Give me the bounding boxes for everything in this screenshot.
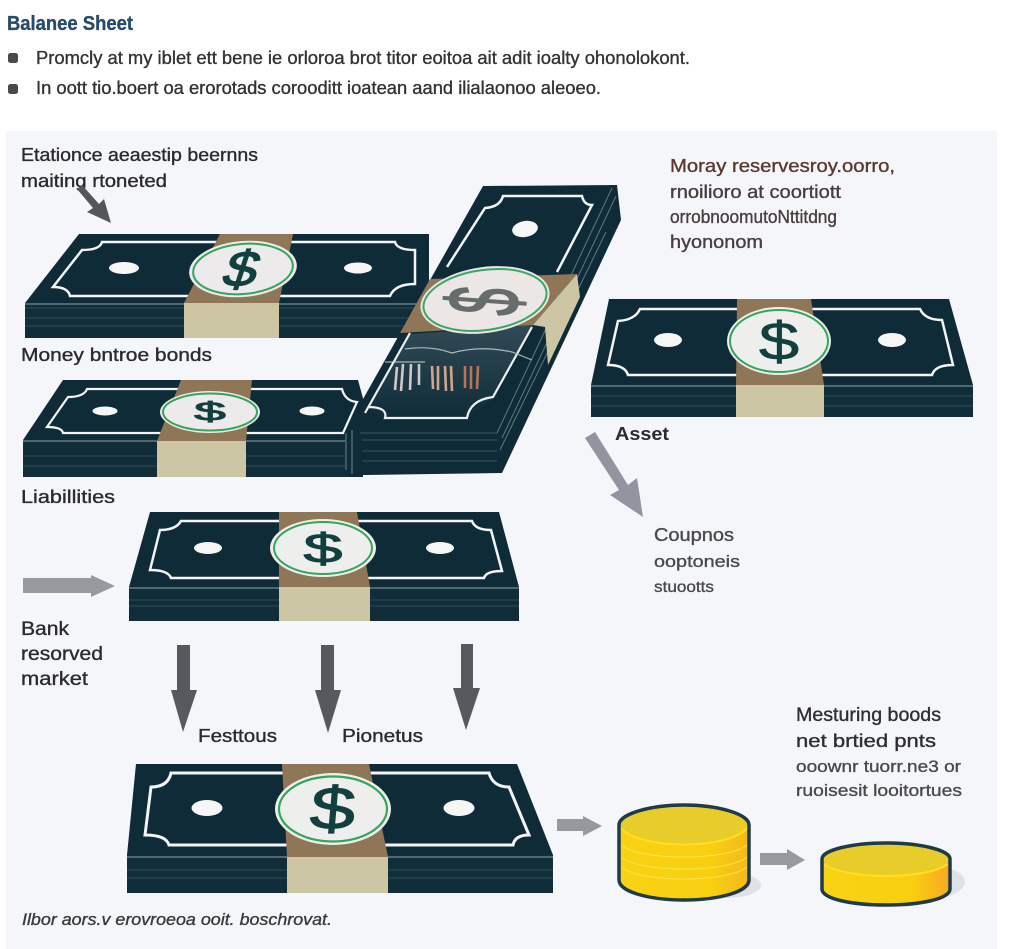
label: pionetus: Pionetus [342, 726, 423, 746]
label: bank reserved market: Bank [21, 619, 70, 640]
text: top-left note: Etationce aeaestip beernns [21, 145, 258, 165]
text: right small note: stuootts [654, 579, 714, 596]
text: right small note: ooptoneis [654, 552, 740, 571]
money stack: bottom [127, 764, 553, 893]
money stack: second left [23, 380, 364, 477]
icon: small coin [822, 843, 965, 905]
money stack: middle: $ [303, 525, 343, 572]
money stack: tilted centre [345, 185, 621, 475]
text: right small note [654, 525, 740, 596]
text: maturing bonds note [796, 705, 962, 800]
text: top-right note: rnoilioro at coortiott [670, 182, 841, 202]
text: right small note: Coupnos [654, 525, 734, 545]
label: bank reserved market [21, 619, 103, 690]
money stack: tilted centre: $ [426, 284, 541, 318]
text: top-left note: maiting rtoneted [21, 171, 167, 191]
label: festtous: Festtous [198, 726, 277, 746]
text: top-right note: Moray reservesroy.oorro, [670, 156, 895, 176]
arrow: to large coin stack [557, 816, 602, 836]
icon: small bar marks [395, 364, 478, 391]
money stack: middle [129, 512, 519, 621]
text: maturing bonds note: net brtied pnts [796, 731, 936, 751]
text: maturing bonds note: ooownr tuorr.ne3 or [796, 757, 961, 776]
money stack: bottom: $ [307, 775, 358, 842]
arrow: to small coin [760, 849, 805, 870]
bullet list: In oott tio.boert oa erorotads corooditt ioatean aand ilialaonoo aleoeo. [36, 78, 601, 98]
money stack: top left [25, 234, 429, 338]
arrow: asset diagonal [585, 432, 643, 517]
text: top-right note: hyononom [670, 232, 763, 252]
bullet list: Promcly at my iblet ett bene ie orloroa brot titor eoitoa ait adit ioalty ohonolokont. [36, 48, 690, 68]
text: maturing bonds note: ruoisesit looitortues [796, 781, 962, 800]
title: Balanee Sheet [7, 13, 133, 35]
label: liabilities: Liabillities [21, 487, 115, 507]
money stack: right [591, 299, 973, 417]
text: top-right note [670, 156, 895, 252]
label: bank reserved market: resorved [21, 644, 103, 665]
label: asset: Asset [615, 424, 669, 444]
money stack: second left: $ [194, 398, 226, 426]
arrow: down centre [315, 645, 341, 733]
icon: large coin stack [619, 805, 761, 900]
text: maturing bonds note: Mesturing boods [796, 705, 941, 726]
money stack: top left: $ [216, 241, 268, 297]
arrow: down right [453, 644, 480, 730]
arrow: horizontal into middle stack [23, 575, 115, 597]
bullet list [8, 48, 690, 98]
label: money bonds: Money bntroe bonds [21, 345, 212, 365]
text: top-left note [21, 145, 258, 191]
label: bank reserved market: market [21, 669, 89, 690]
money stack: right: $ [759, 311, 799, 372]
arrow: down left [171, 645, 197, 732]
text: top-right note: orrobnoomutoNttitdng [670, 207, 837, 227]
arrow: top-left diagonal [77, 185, 111, 223]
text: footnote: Ilbor aors.v erovroeoa ooit. boschrovat. [22, 910, 332, 929]
